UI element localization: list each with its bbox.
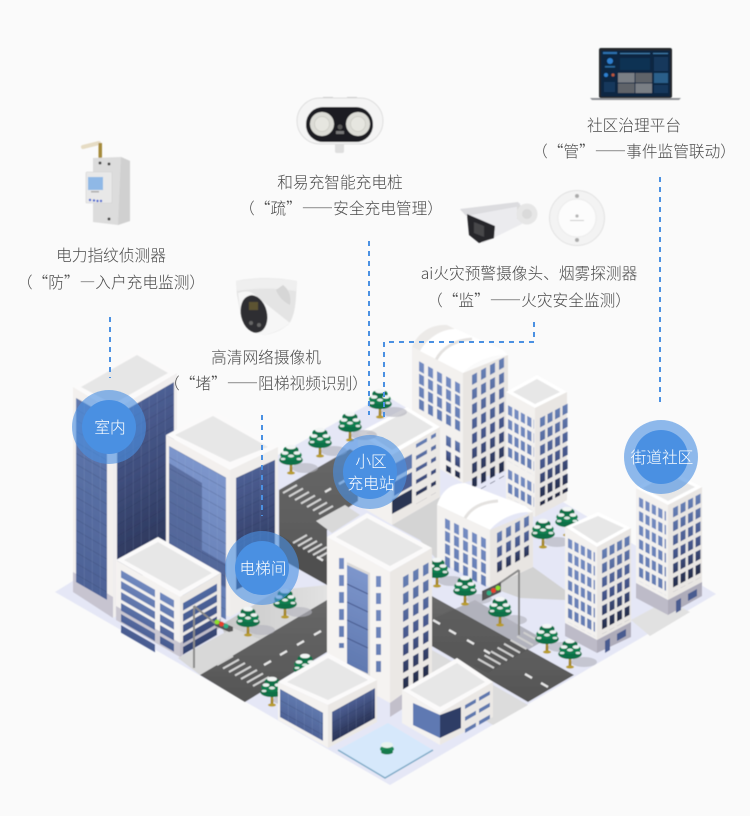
label: community governance platform: （“管”——事件监管联动） (532, 139, 736, 162)
device: laptop platform (590, 48, 681, 100)
road: upper crossing (279, 449, 395, 585)
connector: 监 to charging station (384, 322, 534, 418)
connector: 管 to street community (659, 177, 661, 402)
building: low striped block (116, 537, 221, 657)
marker: 电梯间 (225, 531, 299, 605)
connector: 防 to indoor (109, 317, 111, 378)
device: smart charger (297, 97, 383, 153)
trees: upper street (279, 389, 407, 475)
marker: 电梯间: 电梯间 (239, 556, 287, 579)
label: community governance platform: 社区治理平台 (587, 113, 681, 136)
marker: 街道社区 (624, 420, 698, 494)
device: dome camera (236, 278, 297, 336)
marker: 小区充电站: 充电站 (347, 471, 395, 494)
building: community charging station block (358, 407, 440, 525)
label: smart charger (239, 170, 443, 219)
device: smoke detector (550, 190, 604, 246)
label: AI fire camera and smoke detector (421, 261, 638, 311)
device: power fingerprint detector (83, 143, 130, 225)
building: tall arched tower (412, 325, 508, 494)
marker: 室内 (72, 390, 146, 464)
traffic light: left (194, 606, 233, 668)
label: power fingerprint detector (17, 243, 205, 293)
building: central tower (327, 513, 432, 717)
building: tall glass tower (73, 350, 177, 618)
connector: 堵 to elevator (261, 415, 263, 516)
road: lower right (430, 595, 574, 702)
label: HD network camera: （“堵”——阻梯视频识别） (164, 371, 368, 394)
trees: lower left street (236, 589, 332, 707)
label: smart charger: （“疏”——安全充电管理） (239, 196, 443, 219)
label: AI fire camera and smoke detector: （“监”——火灾安全监测） (427, 288, 631, 311)
traffic light: right (482, 570, 519, 635)
label: HD network camera (164, 345, 368, 394)
label: power fingerprint detector: 电力指纹侦测器 (56, 243, 166, 266)
plaza with small tree (338, 723, 433, 778)
marker: 街道社区: 街道社区 (631, 445, 693, 468)
label: power fingerprint detector: （“防”—入户充电监测） (17, 270, 205, 293)
trees: lower right street (425, 507, 597, 669)
building: far right block (636, 470, 702, 615)
marker: 室内: 室内 (94, 415, 126, 438)
building: mid right block (565, 512, 631, 653)
building: lower arched block (437, 483, 533, 589)
label: community governance platform (532, 113, 736, 162)
building: glass office tower (166, 410, 278, 620)
isometric ground plate (55, 395, 716, 785)
building: front right low block (402, 658, 493, 745)
device: bullet camera (460, 202, 538, 243)
label: smart charger: 和易充智能充电桩 (277, 170, 403, 193)
road: lower left (200, 600, 327, 702)
label: HD network camera: 高清网络摄像机 (211, 345, 321, 368)
marker: 小区充电站: 小区 (355, 449, 387, 472)
connector: 疏 to charging station (368, 241, 370, 415)
building: front left low block (278, 653, 377, 748)
isometric city scene (55, 325, 716, 785)
label: AI fire camera and smoke detector: ai火灾预警摄像头、烟雾探测器 (421, 261, 638, 284)
marker: 小区充电站 (333, 435, 407, 509)
building: narrow block (506, 375, 568, 517)
